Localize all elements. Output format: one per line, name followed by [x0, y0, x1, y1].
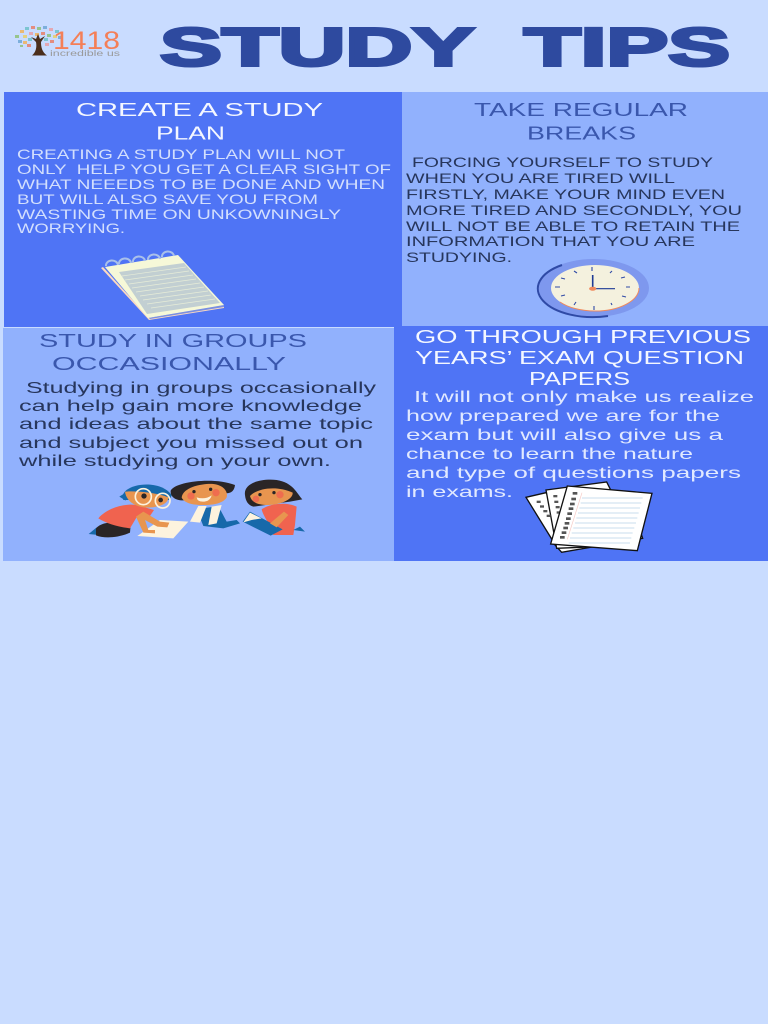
- panel: create a study plan: [4, 92, 402, 327]
- logo number: 1418: [53, 27, 120, 55]
- heading: [76, 100, 323, 144]
- text block: [406, 154, 742, 265]
- title: STUDY TIPS: [160, 18, 730, 78]
- heading: [415, 327, 751, 389]
- text block: while studying on your own.: [17, 453, 331, 470]
- heading: PAPERS: [529, 369, 630, 389]
- text block: It will not only make us realize: [414, 389, 754, 406]
- heading: [39, 331, 307, 374]
- text block: exam but will also give us a: [406, 427, 723, 444]
- logo: 1418 incredible us: [15, 26, 120, 58]
- text block: [406, 389, 754, 501]
- text block: [17, 146, 391, 236]
- text block: CREATING A STUDY PLAN WILL NOT: [17, 146, 346, 162]
- panel: study in groups occasionally: [3, 328, 394, 561]
- heading: TAKE REGULAR: [474, 100, 688, 120]
- heading: YEARS’ EXAM QUESTION: [415, 348, 744, 368]
- text block: ONLY HELP YOU GET A CLEAR SIGHT OF: [17, 161, 391, 177]
- text block: how prepared we are for the: [406, 408, 720, 425]
- panel: previous exam papers: [394, 326, 768, 561]
- text block: INFORMATION THAT YOU ARE: [406, 233, 695, 249]
- text block: FORCING YOURSELF TO STUDY: [412, 154, 714, 170]
- text block: WASTING TIME ON UNKOWNINGLY: [17, 206, 342, 222]
- text block: WORRYING.: [17, 220, 125, 236]
- text block: and ideas about the same topic: [19, 416, 373, 433]
- text block: and type of questions papers: [406, 465, 741, 482]
- text block: in exams.: [406, 484, 513, 501]
- heading: GO THROUGH PREVIOUS: [415, 327, 751, 347]
- text block: Studying in groups occasionally: [26, 380, 376, 397]
- text block: and subject you missed out on: [19, 435, 363, 452]
- heading: PLAN: [156, 124, 225, 144]
- heading: CREATE A STUDY: [76, 100, 323, 120]
- text block: chance to learn the nature: [406, 446, 693, 463]
- heading: [474, 100, 688, 144]
- logo tagline: incredible us: [50, 49, 120, 58]
- icon: tree: [15, 26, 62, 56]
- icon: notepad: [101, 251, 224, 320]
- paper on floor: [137, 520, 188, 538]
- text block: WHAT NEEEDS TO BE DONE AND WHEN: [17, 176, 385, 192]
- icon: clock: [538, 259, 649, 317]
- icon: exam papers: [526, 482, 652, 552]
- heading: BREAKS: [527, 124, 636, 144]
- text block: [17, 380, 376, 470]
- heading: STUDY IN GROUPS: [39, 331, 307, 351]
- text block: MORE TIRED AND SECONDLY, YOU: [406, 202, 742, 218]
- girl right: [243, 480, 305, 536]
- text block: FIRSTLY, MAKE YOUR MIND EVEN: [406, 186, 725, 202]
- panel: take regular breaks: [402, 92, 768, 326]
- text block: WILL NOT BE ABLE TO RETAIN THE: [406, 218, 740, 234]
- text block: WHEN YOU ARE TIRED WILL: [406, 170, 675, 186]
- heading: OCCASIONALLY: [52, 354, 286, 374]
- icon: children studying: [89, 480, 305, 538]
- text block: can help gain more knowledge: [19, 398, 362, 415]
- text block: BUT WILL ALSO SAVE YOU FROM: [17, 191, 318, 207]
- girl middle: [171, 481, 240, 528]
- boy: [89, 484, 172, 537]
- text block: STUDYING.: [406, 249, 512, 265]
